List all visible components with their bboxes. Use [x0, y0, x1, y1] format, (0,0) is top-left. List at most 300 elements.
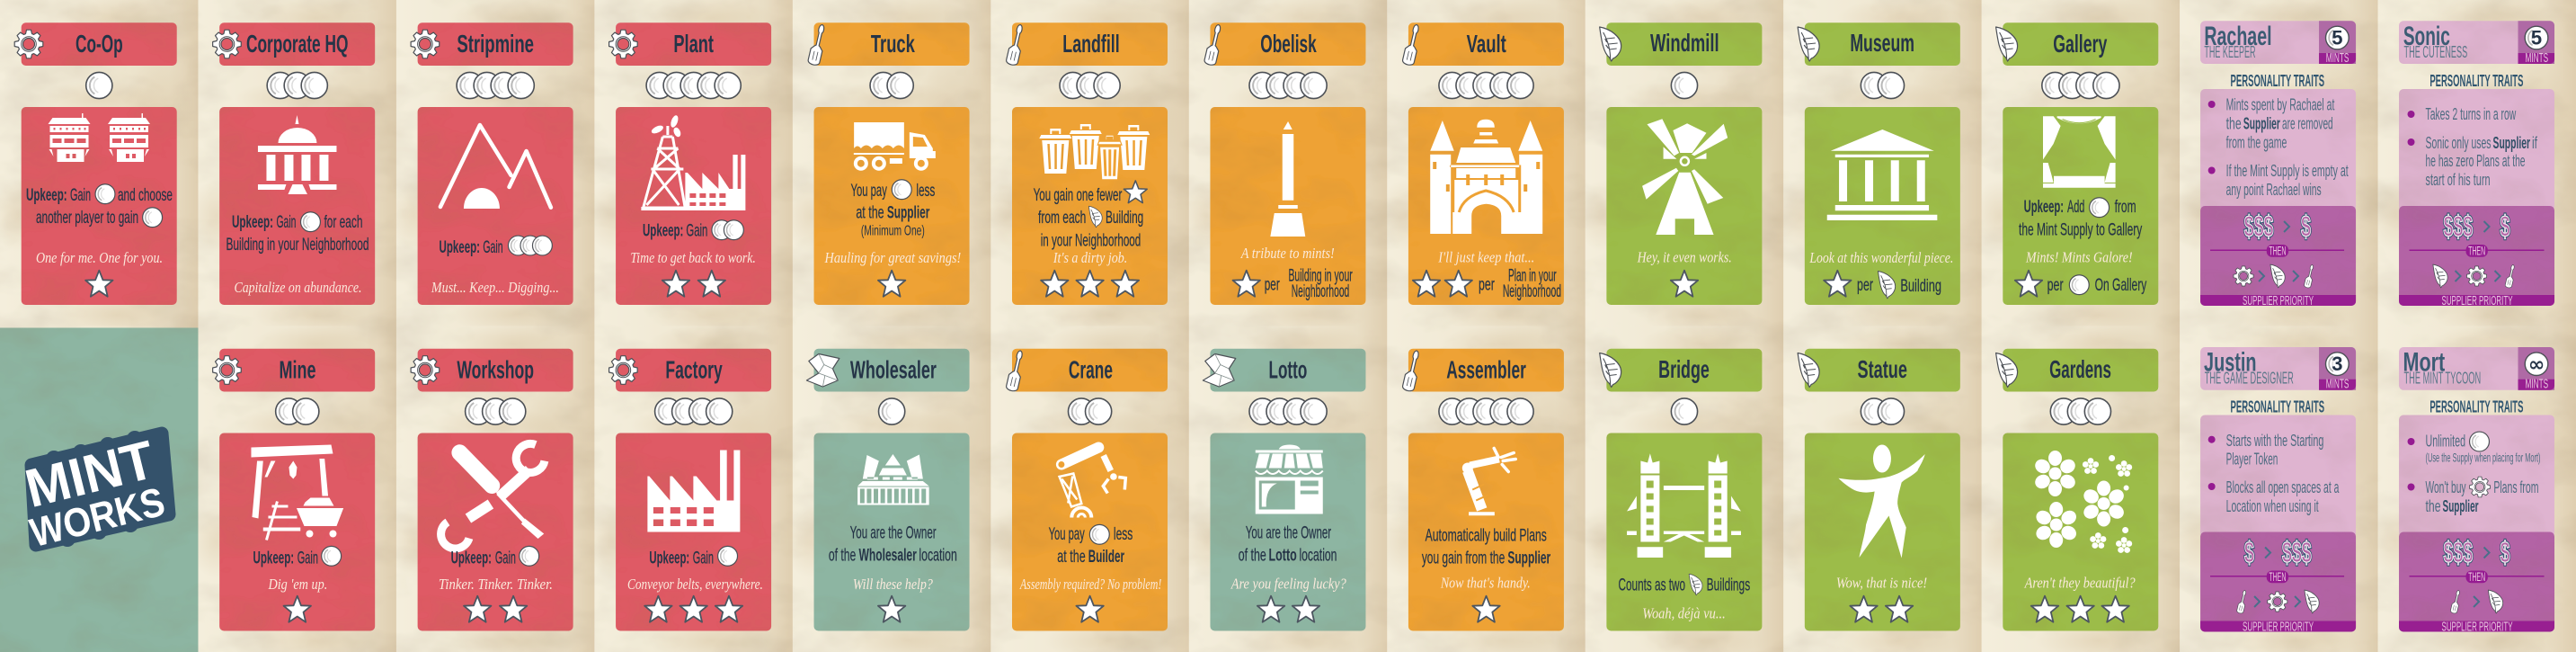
header: Truck: Truck [871, 30, 915, 58]
header: Plant [609, 22, 771, 66]
card: Assembler [1402, 349, 1564, 631]
header: Wholesaler [806, 349, 970, 392]
body panel [1805, 433, 1960, 631]
supplier priority panel: $ [2301, 210, 2311, 243]
supplier priority panel: SUPPLIER PRIORITY [2442, 293, 2513, 308]
effect text: Gain [693, 549, 714, 568]
traits panel: Supplier [2443, 496, 2479, 515]
effect text: Upkeep: [643, 221, 683, 241]
stars [644, 596, 742, 622]
supplier priority panel: $ [2500, 536, 2510, 568]
scoring text: Building in your [1288, 266, 1353, 286]
traits panel [2200, 89, 2356, 211]
effect text: Builder [1088, 547, 1124, 567]
header: Justin: MINTS [2326, 377, 2349, 392]
icon: wrench and screwdriver [441, 443, 545, 549]
effect text: You pay [1049, 524, 1085, 544]
logo: Mint Works: WORKS [25, 478, 169, 556]
supplier priority panel [2399, 206, 2554, 308]
effect text [440, 236, 552, 257]
flavor text: I'll just keep that... [1437, 249, 1534, 266]
card: Sonic [2399, 21, 2554, 308]
heading: personality traits: PERSONALITY TRAITS [2231, 71, 2324, 90]
header: Rachael: Rachael [2204, 22, 2272, 51]
icon: two houses [49, 113, 150, 162]
card: Bridge [1600, 349, 1762, 631]
icon: oil derrick and factory [641, 114, 745, 210]
header: Landfill [1006, 22, 1168, 66]
body panel [22, 107, 177, 305]
header: Obelisk: Obelisk [1260, 30, 1317, 58]
supplier priority panel: SUPPLIER PRIORITY [2442, 619, 2513, 635]
flavor text: Tinker. Tinker. Tinker. [439, 576, 553, 593]
header: Statue: Statue [1858, 355, 1907, 383]
header: Bridge [1600, 349, 1762, 392]
effect text: another player to gain [36, 208, 138, 228]
effect text: the Mint Supply to Gallery [2019, 220, 2142, 240]
header: Sonic: Sonic [2403, 22, 2450, 51]
flavor text: Look at this wonderful piece. [1809, 249, 1953, 266]
header: Gallery: Gallery [2053, 30, 2108, 58]
effect text: Building in your Neighborhood [226, 235, 369, 255]
effect text: Buildings [1707, 576, 1750, 595]
effect text: Upkeep: [2024, 197, 2064, 217]
effect text [2019, 197, 2142, 240]
card: Plant [609, 22, 771, 305]
traits panel: start of his turn [2426, 170, 2491, 189]
header: Corporate HQ: Corporate HQ [246, 30, 348, 58]
header: Windmill [1600, 22, 1762, 66]
effect text: of the [1239, 545, 1266, 565]
header: Bridge: Bridge [1658, 355, 1710, 383]
stars [878, 271, 905, 297]
effect text [1422, 526, 1550, 568]
cost: 4 mints [655, 398, 733, 424]
header: Plant: Plant [673, 30, 714, 58]
effect text: location [1299, 545, 1337, 565]
cost: 2 mints [1068, 398, 1112, 424]
flavor text: Wow, that is nice! [1836, 574, 1927, 591]
scoring text [1824, 271, 1941, 299]
effect text: of the [829, 545, 856, 565]
effect text: Gain [495, 549, 516, 568]
effect text [851, 180, 935, 239]
stars [1850, 596, 1913, 622]
body panel [814, 433, 970, 631]
flavor text: A tribute to mints! [1240, 245, 1335, 262]
effect text: less [916, 181, 935, 201]
header: Museum [1798, 22, 1960, 66]
traits panel: Player Token [2226, 450, 2278, 468]
effect text: Upkeep: [26, 185, 67, 205]
traits panel: from the game [2226, 132, 2287, 151]
header: Rachael [2200, 21, 2356, 66]
header: Lotto: Lotto [1269, 356, 1307, 383]
header: Rachael: THE KEEPER [2204, 43, 2256, 61]
effect text: Lotto [1269, 545, 1297, 565]
effect text: location [919, 545, 957, 565]
header: Gardens [1996, 349, 2158, 392]
supplier priority panel [2399, 532, 2554, 635]
effect text: Upkeep: [253, 549, 294, 568]
header: Factory: Factory [665, 356, 723, 383]
header: Windmill: Windmill [1650, 29, 1719, 57]
flavor text: Must... Keep... Digging... [431, 279, 559, 296]
cost: 3 mints [1060, 72, 1120, 99]
header: Mine: Mine [279, 356, 315, 383]
icon: robot arm [1462, 448, 1515, 514]
header: Obelisk [1204, 22, 1365, 66]
body panel [1210, 433, 1365, 631]
effect text [1049, 524, 1133, 567]
effect text: Supplier [887, 202, 930, 222]
cost: 4 mints [1249, 398, 1327, 424]
icon: crane arm [1058, 448, 1125, 518]
supplier priority panel: THEN [2269, 570, 2286, 584]
effect text: in your Neighborhood [1041, 230, 1141, 250]
effect text: Upkeep: [232, 212, 273, 232]
cost: 4 mints [2042, 72, 2119, 99]
header: Workshop [411, 349, 573, 392]
flavor text: One for me. One for you. [36, 249, 163, 266]
effect text [1034, 181, 1147, 250]
body panel [1606, 107, 1762, 305]
traits panel: Plans from [2493, 478, 2539, 496]
header: Corporate HQ [213, 22, 375, 66]
header: Justin: 3 [2332, 353, 2342, 375]
supplier priority panel: $$$ [2444, 210, 2473, 243]
cost: 5 mints [1439, 72, 1533, 99]
scoring text: per [1479, 275, 1495, 295]
header: Co-Op: Co-Op [76, 30, 123, 58]
traits panel: Blocks all open spaces at a [2226, 478, 2340, 496]
header: Mort: Mort [2403, 347, 2445, 378]
effect text: Add [2067, 197, 2084, 217]
logo: Mint Works: MINT [20, 429, 160, 519]
stars [1041, 271, 1139, 297]
cost: 2 mints [1861, 72, 1905, 99]
effect text: Upkeep: [440, 237, 480, 257]
cost: 2 mints [1861, 398, 1905, 424]
header: Mort: MINTS [2526, 377, 2548, 392]
flavor text: Conveyor belts, everywhere. [627, 576, 763, 593]
supplier priority panel: $ [2301, 210, 2311, 243]
cost: 2 mints [870, 72, 913, 99]
scoring text [2015, 271, 2146, 297]
header: Vault: Vault [1467, 30, 1506, 58]
supplier priority panel: $ [2500, 536, 2510, 568]
cost: 2 mints [276, 398, 319, 424]
supplier priority panel [2200, 206, 2356, 308]
supplier priority panel: $$$ [2244, 210, 2273, 243]
header: Assembler: Assembler [1446, 356, 1526, 383]
supplier priority panel: SUPPLIER PRIORITY [2243, 619, 2314, 635]
card: Lotto [1203, 349, 1365, 631]
effect text: (Minimum One) [861, 224, 925, 239]
traits panel: Mints spent by Rachael at [2226, 95, 2334, 114]
cost: 4 mints [457, 72, 534, 99]
flavor text: Hauling for great savings! [824, 249, 961, 266]
header: Justin: Justin [2204, 347, 2256, 378]
traits panel: Supplier [2493, 133, 2530, 152]
supplier priority panel: $$$ [2282, 536, 2312, 568]
flavor text: Now that's handy. [1440, 574, 1531, 591]
card: Museum [1798, 22, 1960, 305]
effect text: from each [1038, 208, 1086, 228]
cost: 1 mint [879, 398, 905, 424]
effect text: You are the Owner [1246, 522, 1331, 542]
effect text: at the [1057, 547, 1086, 567]
scoring text: per [1265, 275, 1280, 295]
supplier priority panel: SUPPLIER PRIORITY [2243, 293, 2314, 308]
traits panel: Supplier [2243, 114, 2280, 133]
scoring text: per [2047, 275, 2064, 295]
traits panel: Location when using it [2226, 496, 2319, 515]
card: Windmill [1600, 22, 1762, 305]
cost: 1 mint [86, 72, 112, 99]
body panel [814, 107, 970, 305]
header: Rachael: 5 [2332, 27, 2342, 49]
scoring text [1413, 266, 1561, 301]
cost: 5 mints [1439, 398, 1533, 424]
body panel [616, 433, 771, 631]
body panel [1210, 107, 1365, 305]
flavor text: Capitalize on abundance. [234, 279, 361, 296]
icon: windmill [1642, 119, 1728, 235]
stars [662, 271, 725, 297]
traits panel: Unlimited [2426, 432, 2465, 450]
cost: 3 mints [267, 72, 327, 99]
traits panel: if [2532, 133, 2538, 152]
flavor text: Woah, déjà vu... [1642, 604, 1726, 621]
supplier priority panel: $$$ [2282, 536, 2312, 568]
effect text: Supplier [1507, 549, 1550, 568]
card: Stripmine [411, 22, 573, 305]
header: Factory [609, 349, 771, 392]
header: Justin [2200, 347, 2356, 392]
card: Obelisk [1204, 22, 1365, 305]
icon: museum [1827, 130, 1937, 220]
stars [284, 596, 311, 622]
scoring text [1233, 266, 1353, 301]
effect text [26, 184, 173, 228]
cost: 4 mints [1249, 72, 1327, 99]
traits panel [2399, 89, 2554, 211]
effect text: at the [856, 202, 884, 222]
header: Justin: THE GAME DESIGNER [2205, 369, 2294, 387]
header: Sonic: MINTS [2526, 50, 2548, 66]
body panel [219, 107, 375, 305]
body panel [2003, 107, 2158, 305]
effect text: Upkeep: [649, 549, 689, 568]
icon: warehouse [857, 454, 929, 505]
flavor text: Assembly required? No problem! [1019, 576, 1161, 593]
card: Workshop [411, 349, 573, 631]
effect text [643, 220, 743, 241]
supplier priority panel: $ [2244, 536, 2254, 568]
traits panel: the [2426, 496, 2441, 515]
effect text: Gain [686, 221, 707, 241]
traits panel: the [2226, 114, 2242, 133]
header: Rachael: MINTS [2326, 50, 2349, 66]
supplier priority panel [2200, 532, 2356, 635]
header: Workshop: Workshop [457, 356, 534, 383]
card: Vault [1402, 22, 1564, 305]
effect text: Gain [483, 237, 503, 257]
panel: Mint Works logo tile [0, 327, 198, 652]
card: Gardens [1996, 349, 2158, 631]
effect text: and choose [118, 185, 173, 205]
body panel [1606, 433, 1762, 631]
flavor text: Are you feeling lucky? [1230, 576, 1346, 592]
supplier priority panel: $ [2244, 536, 2254, 568]
card: Co-Op [14, 22, 177, 305]
flavor text: Dig 'em up. [268, 576, 327, 593]
icon: statue figure [1838, 444, 1925, 558]
card: Factory [609, 349, 771, 631]
header: Mort: THE MINT TYCOON [2404, 369, 2481, 387]
effect text: for each [324, 212, 362, 232]
effect text: Gain [276, 212, 296, 232]
icon: obelisk [1270, 121, 1305, 237]
body panel [616, 107, 771, 305]
card: Crane [1006, 349, 1168, 631]
supplier priority panel: THEN [2269, 245, 2286, 257]
effect text: You pay [851, 181, 887, 201]
cost: 5 mints [646, 72, 741, 99]
stars [1472, 596, 1500, 622]
flavor text: Mints! Mints Galore! [2025, 249, 2133, 266]
supplier priority panel: THEN [2468, 245, 2485, 257]
effect text: Automatically build Plans [1426, 526, 1547, 546]
scoring text: On Gallery [2095, 275, 2146, 295]
header: Sonic: THE CUTENESS [2404, 43, 2467, 61]
header: Mort [2399, 347, 2554, 392]
header: Vault [1402, 22, 1564, 66]
heading: personality traits: PERSONALITY TRAITS [2231, 397, 2324, 415]
card: Mine [213, 349, 375, 631]
card: Justin [2200, 347, 2356, 635]
supplier priority panel: $$$ [2444, 536, 2473, 568]
logo: Mint Works [20, 429, 169, 556]
body panel [1408, 433, 1564, 631]
effect text: Building [1106, 208, 1143, 228]
supplier priority panel: THEN [2468, 570, 2485, 584]
flavor text: Aren't they beautiful? [2024, 574, 2136, 591]
body panel [418, 107, 573, 305]
cost: 3 mints [466, 398, 526, 424]
card: Truck [807, 22, 970, 305]
scoring text: per [1857, 275, 1873, 295]
header: Landfill: Landfill [1062, 30, 1120, 58]
supplier priority panel: $$$ [2444, 210, 2473, 243]
header: Co-Op [14, 22, 177, 66]
effect text: from [2115, 197, 2136, 217]
header: Crane [1006, 349, 1168, 392]
card: Rachael [2200, 21, 2356, 308]
stars [878, 596, 905, 622]
body panel [1012, 433, 1168, 631]
effect text: Wholesaler [859, 545, 917, 565]
header: Truck [807, 22, 970, 66]
body panel [1805, 107, 1960, 305]
scoring text: Neighborhood [1292, 281, 1349, 301]
stars [464, 596, 527, 622]
header: Stripmine [411, 22, 573, 66]
supplier priority panel: $$$ [2244, 210, 2273, 243]
body panel [219, 433, 375, 631]
icon: capitol building [258, 115, 336, 194]
traits panel: are removed [2282, 114, 2333, 133]
icon: factory [647, 450, 740, 532]
cost: 3 mints [2050, 398, 2110, 424]
header: Sonic [2399, 21, 2554, 66]
header: Gallery [1996, 22, 2158, 66]
effect text: Counts as two [1618, 576, 1685, 595]
icon: castle gate [1430, 120, 1542, 234]
icon: stage curtains [2043, 116, 2116, 188]
flavor text: Time to get back to work. [630, 249, 756, 266]
effect text: you gain from the [1422, 549, 1505, 568]
traits panel: Won't buy [2426, 478, 2466, 496]
flavor text: Will these help? [853, 576, 933, 593]
scoring text: Plan in your [1508, 266, 1557, 286]
body panel [418, 433, 573, 631]
scoring text: Building [1900, 276, 1941, 296]
card: Corporate HQ [213, 22, 375, 305]
icon: trash cans [1039, 124, 1150, 180]
icon: mine shaft and cart [251, 444, 343, 540]
stars [85, 271, 113, 297]
stars [1671, 271, 1698, 297]
card: Landfill [1006, 22, 1168, 305]
traits panel: Sonic only uses [2426, 133, 2492, 152]
effect text [1239, 522, 1337, 565]
header: Assembler [1402, 349, 1564, 392]
effect text: Gain [70, 185, 91, 205]
header: Mine [213, 349, 375, 392]
body panel [2003, 433, 2158, 631]
header: Wholesaler: Wholesaler [850, 356, 937, 383]
cost: 1 mint [1671, 72, 1698, 99]
stars [2031, 596, 2129, 622]
card: Gallery [1996, 22, 2158, 305]
icon: tower bridge [1627, 453, 1741, 558]
supplier priority panel: $$$ [2444, 536, 2473, 568]
effect text [829, 522, 957, 565]
header: Stripmine: Stripmine [457, 30, 534, 58]
cost: 1 mint [1671, 398, 1698, 424]
scoring text: Neighborhood [1503, 281, 1561, 301]
body panel [1408, 107, 1564, 305]
effect text: Upkeep: [451, 549, 492, 568]
traits panel [2399, 415, 2554, 538]
icon: lotto shop [1256, 444, 1323, 514]
header: Statue [1798, 349, 1960, 392]
traits panel: If the Mint Supply is empty at [2226, 161, 2349, 180]
header: Museum: Museum [1850, 29, 1914, 57]
stars [1257, 596, 1319, 622]
flavor text: It's a dirty job. [1053, 249, 1127, 266]
effect text [226, 212, 369, 255]
supplier priority panel: $ [2500, 210, 2510, 243]
effect text: You are the Owner [850, 522, 937, 542]
header: Gardens: Gardens [2049, 355, 2111, 383]
header: Mort: ∞ [2528, 354, 2545, 376]
icon: truck [854, 122, 936, 169]
card: Mort [2399, 347, 2554, 635]
effect text: Gain [298, 549, 318, 568]
